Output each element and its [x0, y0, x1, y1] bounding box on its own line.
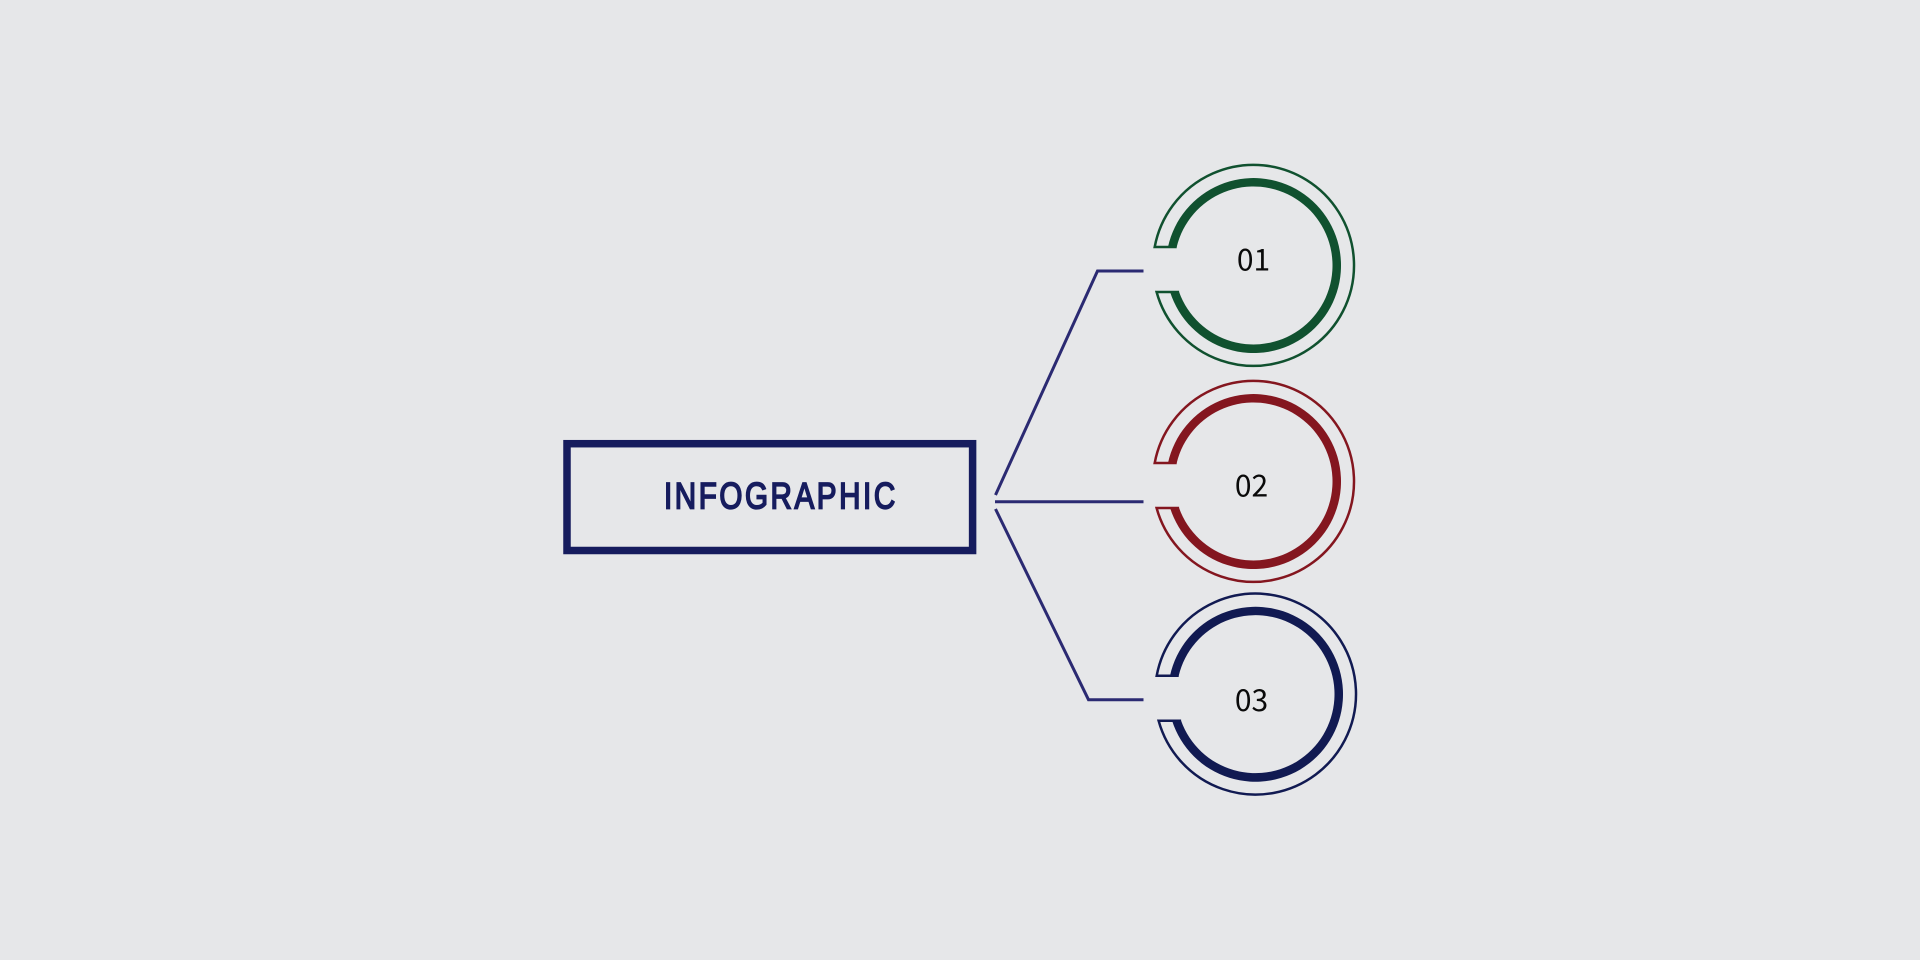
- box title: INFOGRAPHIC: [664, 476, 895, 517]
- ring: 03 navy: [1157, 594, 1356, 795]
- box outline: [567, 444, 973, 550]
- connector: box to 02: [995, 500, 1144, 503]
- connector: box to 03: [996, 509, 1144, 700]
- inner thick ring: [1168, 394, 1341, 569]
- number 02: 02: [1235, 462, 1268, 506]
- central box: infographic: [567, 444, 973, 550]
- ring: 02 red: [1155, 381, 1354, 582]
- ring: 01 green: [1155, 165, 1354, 366]
- inner thick ring: [1168, 178, 1341, 353]
- outer thin ring: [1155, 165, 1354, 366]
- connector: box to 01: [996, 271, 1144, 495]
- outer thin ring: [1155, 381, 1354, 582]
- number 03: 03: [1235, 676, 1268, 720]
- number 01: 01: [1237, 236, 1270, 280]
- outer thin ring: [1157, 594, 1356, 795]
- inner thick ring: [1170, 607, 1343, 782]
